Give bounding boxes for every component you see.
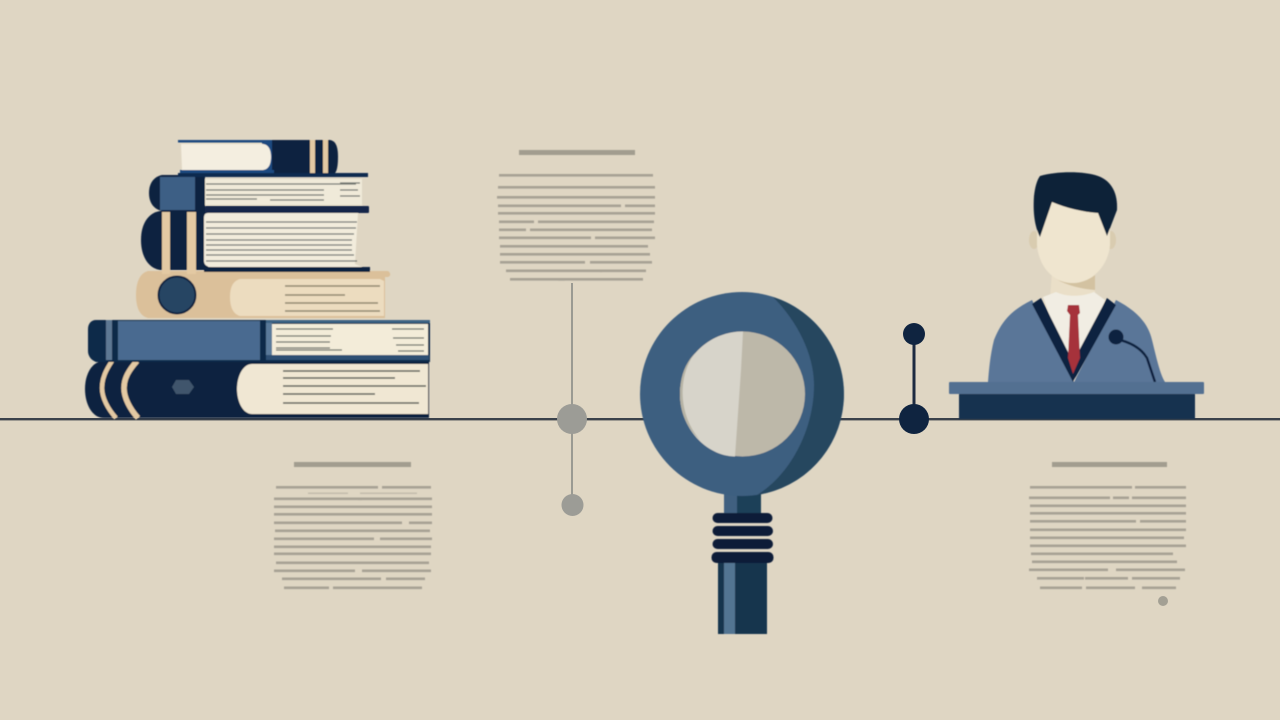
lens (680, 332, 805, 456)
heading bar (519, 150, 635, 155)
text block: top centre (497, 150, 655, 281)
presenter at podium (949, 172, 1204, 419)
text block: lower left (274, 462, 432, 589)
podium base (959, 393, 1195, 419)
book 6: large navy book (85, 361, 429, 418)
microphone (1108, 330, 1155, 382)
hair (1034, 172, 1117, 237)
book 3: striped navy book (141, 211, 370, 274)
head (1037, 200, 1110, 283)
body lines (497, 174, 655, 281)
body lines (274, 486, 432, 589)
heading bar (1052, 462, 1167, 467)
timeline axis (0, 418, 1280, 420)
handle (712, 494, 774, 634)
book 2: blue-spined book (149, 173, 369, 213)
book stack (85, 140, 430, 418)
book 4: tan book (136, 271, 390, 318)
book 5: blue book (88, 320, 430, 362)
jacket (988, 300, 1165, 382)
red tie (1067, 305, 1080, 374)
magnifying glass (640, 292, 844, 634)
ring (640, 292, 844, 496)
shirt (1043, 292, 1105, 382)
dark connector with nodes (899, 323, 929, 434)
end dot (1158, 596, 1168, 606)
podium top (949, 382, 1204, 394)
neck (1050, 272, 1095, 318)
text block: lower right (1029, 462, 1186, 589)
lapels (1032, 298, 1116, 382)
book 1: top book (178, 140, 338, 173)
ears (1029, 231, 1116, 249)
heading bar (294, 462, 411, 467)
badge circle (158, 276, 196, 314)
body lines (1029, 486, 1186, 589)
grey connector with nodes (557, 283, 587, 516)
